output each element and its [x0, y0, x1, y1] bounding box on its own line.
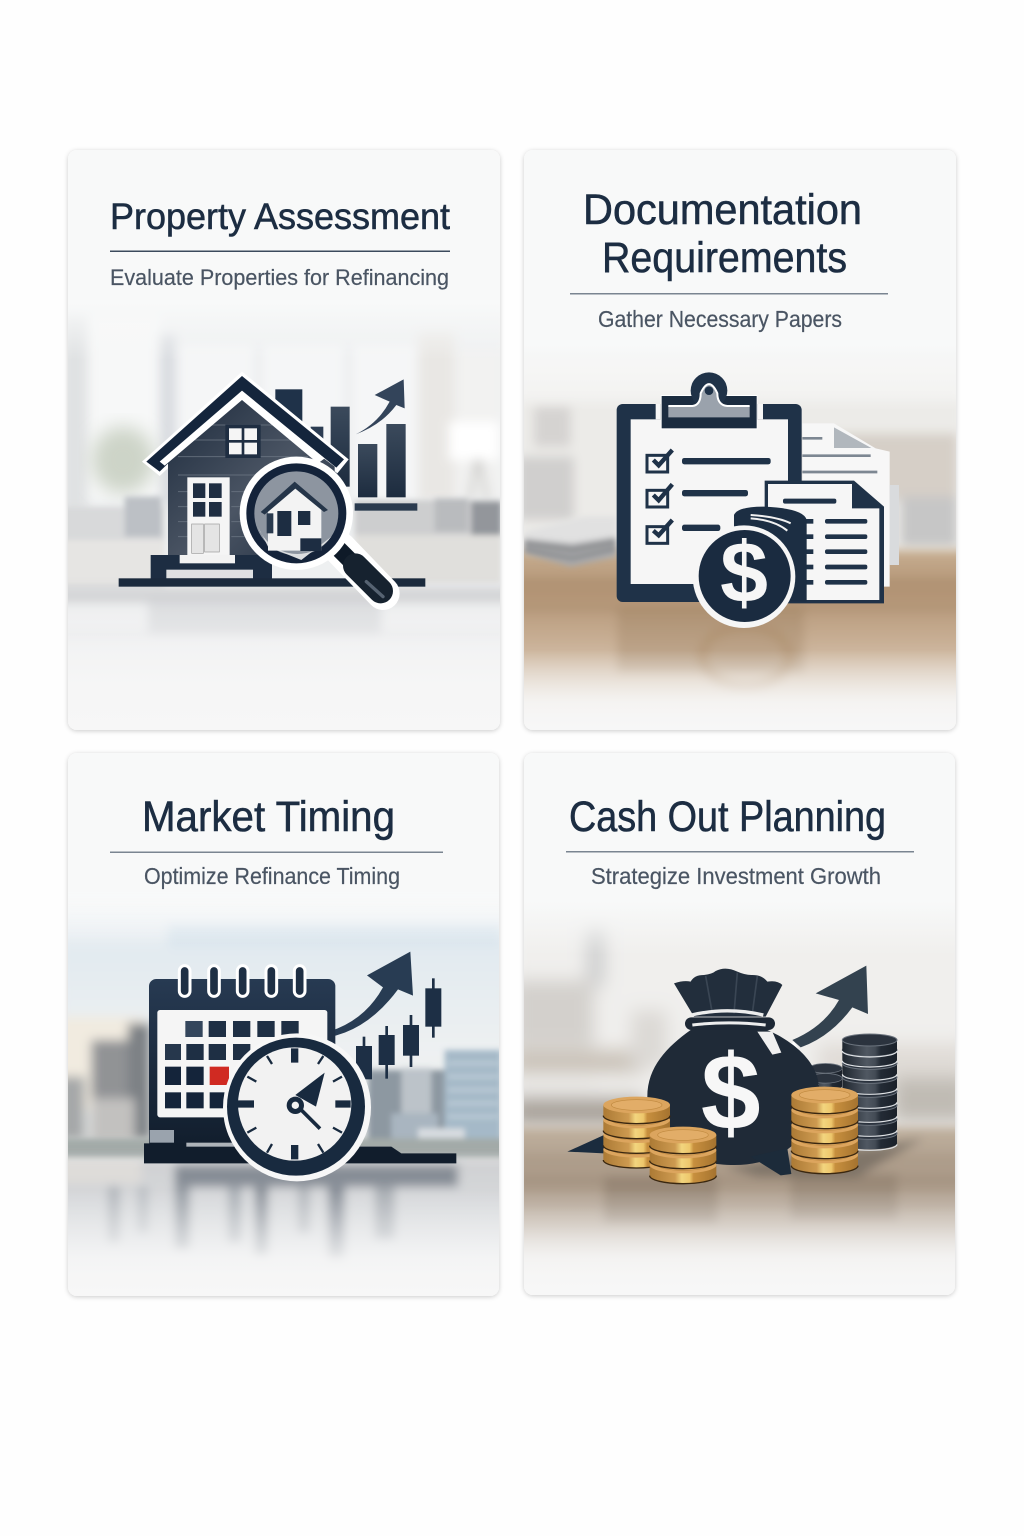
- panel: documentation requirements: [514, 150, 967, 737]
- garden seen through window: [91, 427, 155, 493]
- subtitle: Optimize Refinance Timing: [144, 863, 400, 889]
- growth arrow: [792, 966, 868, 1047]
- stack of papers on desk: [524, 517, 617, 567]
- coin stack and dollar coin: $: [720, 525, 768, 621]
- icon: money bag, coins and growth arrow: [567, 966, 897, 1184]
- fades: [524, 340, 956, 365]
- subtitle: Evaluate Properties for Refinancing: [110, 265, 449, 290]
- subtitle: Strategize Investment Growth: [591, 863, 881, 889]
- dark coin stacks: [809, 1034, 897, 1150]
- panel: cash out planning: [511, 753, 971, 1295]
- candlestick chart and arrow: [315, 952, 441, 1080]
- title: Documentation: [583, 186, 862, 234]
- title line two: Requirements: [602, 234, 847, 282]
- front document: [765, 481, 884, 603]
- money bag: $: [701, 1032, 761, 1152]
- house: [119, 372, 425, 587]
- title: Market Timing: [142, 793, 395, 841]
- fades: [524, 905, 954, 940]
- title rule: [110, 852, 443, 853]
- card surface: [68, 753, 499, 1296]
- card surface: [68, 150, 500, 730]
- background photo: desk with papers: [524, 393, 956, 702]
- background photo: city skyline over water: [58, 860, 511, 1325]
- title: Cash Out Planning: [569, 793, 886, 841]
- clipboard: [617, 372, 802, 602]
- icon: calendar, clock and rising candlesticks: [144, 952, 456, 1181]
- background photo: interior with wooden table: [524, 923, 955, 1258]
- coin stack and dollar coin: [693, 507, 807, 628]
- gold coin stacks: [603, 1087, 858, 1184]
- title rule: [110, 250, 450, 252]
- subtitle: Gather Necessary Papers: [598, 306, 842, 332]
- background photo: living room: [68, 322, 500, 641]
- title: Property Assessment: [110, 196, 451, 237]
- icon: clipboard, documents and coin: [617, 372, 899, 628]
- highlighted date: [210, 1067, 229, 1085]
- panel: property assessment: [58, 150, 511, 740]
- title rule: [570, 293, 888, 294]
- icon: house, magnifier and growth chart: [119, 372, 425, 597]
- money bag: [567, 969, 819, 1175]
- back pages: [802, 423, 899, 587]
- clock: [223, 1033, 371, 1181]
- card surface: [524, 753, 955, 1295]
- title rule: [566, 851, 914, 852]
- fades: [68, 860, 499, 945]
- calendar: [144, 966, 456, 1163]
- rising bar chart: [275, 379, 417, 511]
- card surface: [524, 150, 956, 730]
- panel: market timing: [58, 753, 511, 1325]
- magnifying glass: [240, 457, 383, 597]
- fades: [68, 304, 500, 342]
